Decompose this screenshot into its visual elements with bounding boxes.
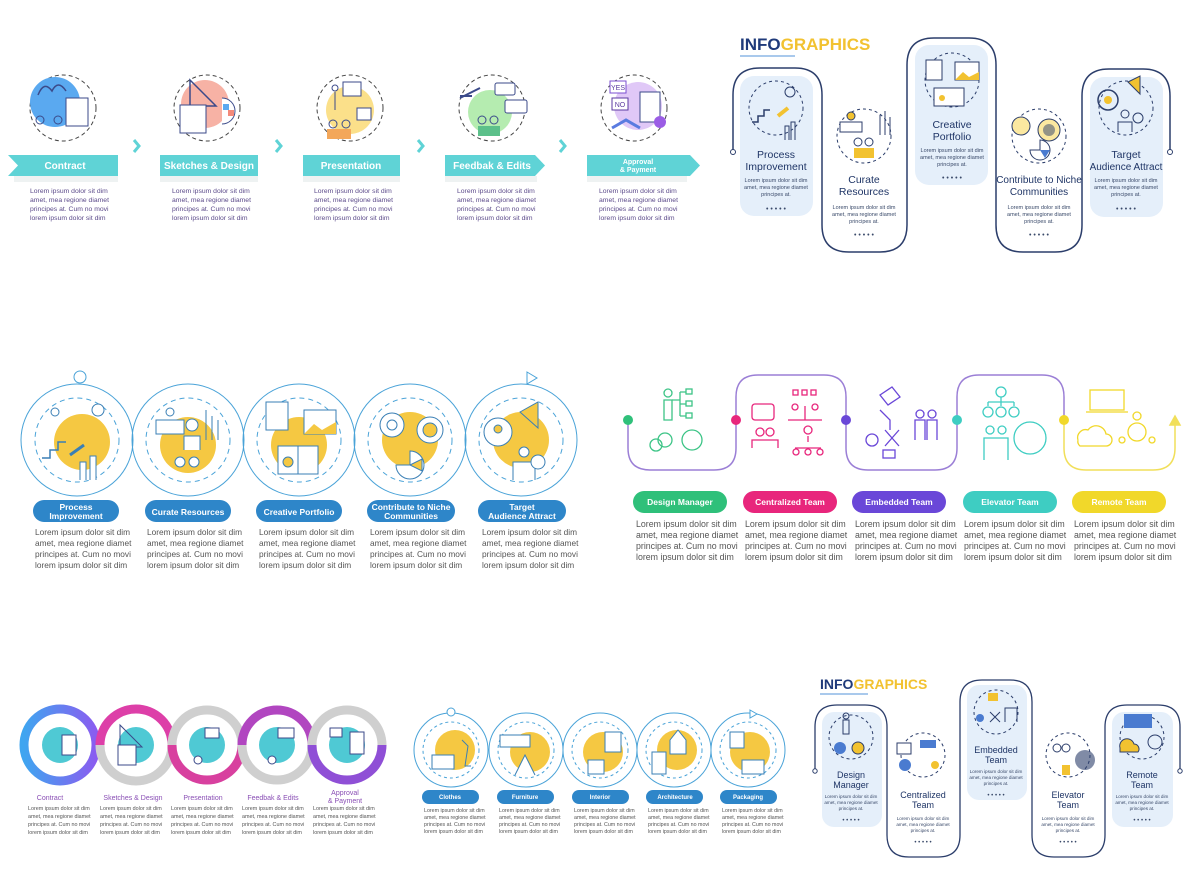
text blocks: principes at. Cum no movi [314, 206, 393, 213]
card: Elevator Team: Team [1057, 800, 1079, 810]
text blocks: lorem ipsum dolor sit dim [457, 215, 533, 222]
card: Process Improvement: Lorem ipsum dolor sit dim [745, 178, 808, 184]
text blocks: principes at. Cum no movi [745, 541, 847, 551]
text blocks: amet, mea regione diamet [259, 538, 356, 548]
pill labels: Interior [590, 795, 611, 801]
text blocks: Lorem ipsum dolor sit dim [35, 527, 130, 537]
text blocks: amet, mea regione diamet [964, 530, 1067, 540]
pill labels: Clothes [439, 795, 462, 801]
text blocks: amet, mea regione diamet [242, 814, 305, 820]
text blocks: amet, mea regione diamet [1074, 530, 1177, 540]
text blocks: principes at. Cum no movi [499, 822, 560, 828]
ring icons [42, 725, 365, 765]
icon: sketches [174, 75, 240, 141]
card: Curate Resources: amet, mea regione diamet [832, 212, 896, 218]
card: Embedded Team: Team [985, 755, 1007, 765]
card: Contribute to Niche Communities: principes at. [1024, 219, 1054, 225]
text blocks: Lorem ipsum dolor sit dim [499, 808, 560, 814]
pill labels: Architecture [657, 795, 693, 801]
text blocks: principes at. Cum no movi [457, 206, 536, 213]
panel: design team snake timeline (middle-right) [623, 375, 1180, 562]
text blocks: amet, mea regione diamet [28, 814, 91, 820]
text blocks: lorem ipsum dolor sit dim [855, 552, 953, 562]
card: Target Audience Attract: amet, mea regione diamet [1094, 185, 1158, 191]
text blocks [636, 519, 1177, 562]
card: Embedded Team: • • • • • [987, 793, 1005, 799]
icons [432, 730, 770, 775]
text blocks: principes at. Cum no movi [172, 206, 251, 213]
text blocks: lorem ipsum dolor sit dim [482, 560, 574, 570]
pill labels [49, 502, 556, 521]
card: Elevator Team: principes at. [1056, 828, 1080, 833]
text blocks: lorem ipsum dolor sit dim [100, 830, 160, 836]
card: Process Improvement: • • • • • [766, 206, 787, 213]
card: Design Manager: amet, mea regione diamet [824, 800, 878, 805]
text blocks: principes at. Cum no movi [30, 206, 109, 213]
circle icons [21, 371, 577, 496]
card: Process Improvement: Improvement [745, 161, 807, 173]
card: Centralized Team: amet, mea regione diamet [896, 822, 950, 827]
text blocks: amet, mea regione diamet [30, 197, 109, 204]
text blocks: Lorem ipsum dolor sit dim [599, 188, 677, 195]
text blocks: principes at. Cum no movi [424, 822, 485, 828]
text blocks: principes at. Cum no movi [259, 549, 355, 559]
text blocks: Lorem ipsum dolor sit dim [1074, 519, 1175, 529]
text blocks: Lorem ipsum dolor sit dim [636, 519, 737, 529]
ribbon: Approval & Payment: & Payment [620, 167, 657, 174]
text blocks: lorem ipsum dolor sit dim [370, 560, 462, 570]
card: Centralized Team: Team [912, 800, 934, 810]
ribbon: Contract [8, 155, 118, 182]
card: Target Audience Attract: principes at. [1111, 192, 1141, 198]
pill labels: Remote Team [1091, 497, 1147, 507]
card: Target Audience Attract: Lorem ipsum dolor sit dim [1095, 178, 1158, 184]
text blocks: lorem ipsum dolor sit dim [313, 830, 373, 836]
text blocks: amet, mea regione diamet [172, 197, 251, 204]
card: Remote Team: Lorem ipsum dolor sit dim [1116, 794, 1168, 799]
text blocks: amet, mea regione diamet [100, 814, 163, 820]
text blocks: amet, mea regione diamet [636, 530, 739, 540]
card fills [822, 685, 1173, 827]
card: Design Manager [824, 713, 878, 824]
pill labels: Centralized Team [755, 497, 825, 507]
text blocks: principes at. Cum no movi [964, 541, 1066, 551]
pills [633, 491, 1166, 513]
text blocks: lorem ipsum dolor sit dim [30, 215, 106, 222]
icon: embedded team [866, 387, 937, 458]
text blocks: lorem ipsum dolor sit dim [147, 560, 239, 570]
icon: approval: NO [615, 102, 626, 109]
text blocks: lorem ipsum dolor sit dim [242, 830, 302, 836]
text blocks: principes at. Cum no movi [35, 549, 131, 559]
card: Design Manager: Design [837, 770, 865, 780]
card: Contribute to Niche Communities: amet, mea regione diamet [1007, 212, 1071, 218]
pill labels: Process [59, 502, 93, 512]
text blocks: principes at. Cum no movi [171, 822, 233, 828]
text blocks: Lorem ipsum dolor sit dim [574, 808, 635, 814]
card: Target Audience Attract: Target [1111, 149, 1141, 161]
card: Remote Team: amet, mea regione diamet [1115, 800, 1169, 805]
card: Creative Portfolio [920, 53, 984, 182]
icon: contract [30, 75, 96, 141]
text blocks: lorem ipsum dolor sit dim [28, 830, 88, 836]
text blocks: Lorem ipsum dolor sit dim [313, 806, 375, 812]
text blocks: lorem ipsum dolor sit dim [648, 829, 707, 835]
text blocks: Lorem ipsum dolor sit dim [482, 527, 577, 537]
card: Elevator Team: • • • • • [1059, 840, 1077, 846]
labels: Feedbak & Edits [247, 795, 299, 802]
ribbon: Contract: Contract [44, 161, 86, 172]
card: Design Manager: • • • • • [842, 818, 860, 824]
icon: centralized team [752, 390, 823, 455]
card: Target Audience Attract: Audience Attract [1090, 162, 1163, 173]
card: Centralized Team: Lorem ipsum dolor sit dim [897, 816, 949, 821]
card: Curate Resources: Lorem ipsum dolor sit dim [833, 205, 896, 211]
ribbon: Feedbak & Edits: Feedbak & Edits [453, 161, 531, 172]
pill labels: Target [509, 502, 535, 512]
card: Embedded Team: principes at. [984, 781, 1008, 786]
card: Process Improvement [744, 81, 808, 213]
text blocks: amet, mea regione diamet [745, 530, 848, 540]
card: Curate Resources: Resources [839, 186, 889, 198]
text blocks: amet, mea regione diamet [574, 815, 636, 821]
text blocks: Lorem ipsum dolor sit dim [172, 188, 250, 195]
text blocks: Lorem ipsum dolor sit dim [147, 527, 242, 537]
card: Centralized Team: principes at. [911, 828, 935, 833]
labels: Sketches & Design [103, 795, 163, 802]
card: Remote Team: • • • • • [1133, 818, 1151, 824]
text blocks: principes at. Cum no movi [28, 822, 90, 828]
text blocks: amet, mea regione diamet [648, 815, 710, 821]
ribbon: Presentation: Presentation [321, 161, 381, 172]
card: Target Audience Attract [1090, 76, 1163, 213]
text blocks: principes at. Cum no movi [1074, 541, 1176, 551]
text blocks: lorem ipsum dolor sit dim [1074, 552, 1172, 562]
text blocks: principes at. Cum no movi [574, 822, 635, 828]
text blocks: principes at. Cum no movi [370, 549, 466, 559]
labels: & Payment [328, 798, 362, 805]
panel: team cards (bottom-right) [813, 676, 1182, 857]
text blocks: principes at. Cum no movi [648, 822, 709, 828]
card fills [740, 45, 1163, 217]
text blocks: lorem ipsum dolor sit dim [636, 552, 734, 562]
text blocks: Lorem ipsum dolor sit dim [259, 527, 354, 537]
text blocks: amet, mea regione diamet [313, 814, 376, 820]
card: Design Manager: Lorem ipsum dolor sit dim [825, 794, 877, 799]
text blocks: principes at. Cum no movi [636, 541, 738, 551]
icon: creative portfolio [266, 402, 336, 474]
icon: elevator team [983, 387, 1046, 460]
text blocks: amet, mea regione diamet [424, 815, 486, 821]
pill labels: Audience Attract [488, 511, 556, 521]
pill labels: Improvement [49, 511, 103, 521]
card: Centralized Team [896, 733, 950, 846]
text blocks: amet, mea regione diamet [499, 815, 561, 821]
text blocks: Lorem ipsum dolor sit dim [28, 806, 90, 812]
icon: target audience [484, 402, 549, 480]
card: Elevator Team: Elevator [1051, 790, 1085, 800]
pills [422, 790, 777, 804]
text blocks: principes at. Cum no movi [855, 541, 957, 551]
pill labels: Contribute to Niche [372, 502, 451, 512]
icon: curate resources [156, 408, 218, 473]
ribbon: Presentation [303, 155, 400, 182]
ribbon: Sketches & Design [160, 155, 258, 182]
card: Embedded Team [969, 690, 1023, 799]
card: Creative Portfolio: principes at. [937, 162, 967, 168]
pill labels: Creative Portfolio [264, 507, 334, 517]
card: Remote Team: Remote [1126, 770, 1158, 780]
card: Contribute to Niche Communities [996, 109, 1082, 239]
card: Curate Resources [832, 109, 896, 239]
card: Process Improvement: Process [757, 149, 795, 161]
ribbon: Approval & Payment: Approval [623, 159, 653, 166]
labels [37, 790, 362, 805]
text blocks: principes at. Cum no movi [313, 822, 375, 828]
text blocks: Lorem ipsum dolor sit dim [457, 188, 535, 195]
icon: niche communities [380, 412, 443, 479]
text blocks: Lorem ipsum dolor sit dim [370, 527, 465, 537]
text blocks: amet, mea regione diamet [35, 538, 132, 548]
text blocks: Lorem ipsum dolor sit dim [30, 188, 108, 195]
card: Creative Portfolio: • • • • • [942, 175, 963, 182]
card: Contribute to Niche Communities: Lorem ipsum dolor sit dim [1008, 205, 1071, 211]
ribbon: Approval & Payment [587, 155, 700, 182]
pill labels: Elevator Team [981, 497, 1039, 507]
icon: approval [601, 75, 667, 141]
card: Centralized Team: Centralized [900, 790, 946, 800]
card: Contribute to Niche Communities: Contribute to Niche [996, 175, 1082, 186]
card: Creative Portfolio: Portfolio [933, 131, 971, 143]
text blocks: lorem ipsum dolor sit dim [424, 829, 483, 835]
card: Creative Portfolio: Creative [932, 119, 972, 131]
text blocks: lorem ipsum dolor sit dim [574, 829, 633, 835]
card: Elevator Team: amet, mea regione diamet [1041, 822, 1095, 827]
icon: approval: YES [611, 85, 625, 92]
text blocks: lorem ipsum dolor sit dim [745, 552, 843, 562]
text blocks: principes at. Cum no movi [599, 206, 678, 213]
pill labels [647, 497, 1147, 507]
text blocks: principes at. Cum no movi [147, 549, 243, 559]
arrows between steps [134, 140, 565, 152]
connector path [730, 38, 1172, 252]
text blocks: principes at. Cum no movi [100, 822, 162, 828]
text blocks: amet, mea regione diamet [314, 197, 393, 204]
text blocks: Lorem ipsum dolor sit dim [171, 806, 233, 812]
card: Process Improvement: amet, mea regione diamet [744, 185, 808, 191]
text blocks: Lorem ipsum dolor sit dim [648, 808, 709, 814]
card: Target Audience Attract: • • • • • [1116, 206, 1137, 213]
card: Remote Team [1115, 714, 1169, 824]
icon: presentation [317, 75, 383, 141]
text blocks: lorem ipsum dolor sit dim [964, 552, 1062, 562]
panel: design process timeline (top-left) [8, 75, 700, 222]
ribbon: Feedbak & Edits [445, 155, 545, 182]
text blocks: lorem ipsum dolor sit dim [599, 215, 675, 222]
text blocks [35, 527, 579, 570]
text blocks: lorem ipsum dolor sit dim [171, 830, 231, 836]
panel: circles with yellow blobs (middle-left) [21, 371, 579, 570]
text blocks: amet, mea regione diamet [457, 197, 536, 204]
text blocks: lorem ipsum dolor sit dim [314, 215, 390, 222]
card: Embedded Team: Embedded [974, 745, 1018, 755]
icon: design manager [650, 389, 702, 451]
card: Centralized Team: • • • • • [914, 840, 932, 846]
text blocks: Lorem ipsum dolor sit dim [745, 519, 846, 529]
card: Process Improvement: principes at. [761, 192, 791, 198]
labels: Presentation [183, 795, 223, 802]
pill labels [439, 795, 763, 801]
text blocks: lorem ipsum dolor sit dim [259, 560, 351, 570]
text blocks: Lorem ipsum dolor sit dim [964, 519, 1065, 529]
icon: remote team [1078, 390, 1155, 446]
icon: process improvement [42, 404, 110, 480]
card: Contribute to Niche Communities: Communities [1010, 187, 1068, 198]
pill labels: Embedded Team [865, 497, 933, 507]
text blocks: Lorem ipsum dolor sit dim [855, 519, 956, 529]
connector path [813, 680, 1182, 857]
pill labels: Furniture [512, 795, 539, 801]
text blocks: Lorem ipsum dolor sit dim [242, 806, 304, 812]
text blocks: lorem ipsum dolor sit dim [499, 829, 558, 835]
text blocks: Lorem ipsum dolor sit dim [314, 188, 392, 195]
card: Elevator Team: Lorem ipsum dolor sit dim [1042, 816, 1094, 821]
text blocks: Lorem ipsum dolor sit dim [100, 806, 162, 812]
card: Curate Resources: Curate [848, 174, 880, 186]
labels: Contract [37, 795, 63, 802]
text blocks: amet, mea regione diamet [147, 538, 244, 548]
card: Contribute to Niche Communities: • • • • • [1029, 232, 1050, 239]
rings [24, 709, 382, 781]
text blocks: lorem ipsum dolor sit dim [35, 560, 127, 570]
text blocks [424, 808, 784, 835]
circles [414, 708, 785, 787]
panel: infographics cards (top-right) [730, 35, 1172, 252]
panel: gradient ring chain (bottom-left) [24, 709, 382, 836]
icon: feedback [459, 75, 527, 141]
card: Embedded Team: amet, mea regione diamet [969, 775, 1023, 780]
text blocks [30, 188, 678, 222]
card: Elevator Team [1041, 733, 1095, 846]
card: Remote Team: principes at. [1130, 806, 1154, 811]
text blocks: Lorem ipsum dolor sit dim [424, 808, 485, 814]
text blocks: amet, mea regione diamet [171, 814, 234, 820]
text blocks: amet, mea regione diamet [482, 538, 579, 548]
pill labels: Curate Resources [152, 507, 225, 517]
card: Creative Portfolio: Lorem ipsum dolor sit dim [921, 148, 984, 154]
text blocks: amet, mea regione diamet [599, 197, 678, 204]
dots [623, 415, 1069, 425]
text blocks: lorem ipsum dolor sit dim [722, 829, 781, 835]
labels: Approval [331, 790, 359, 797]
title: INFOGRAPHICS [820, 676, 927, 692]
text blocks: principes at. Cum no movi [242, 822, 304, 828]
card: Design Manager: principes at. [839, 806, 863, 811]
pill labels: Communities [384, 511, 438, 521]
text blocks: principes at. Cum no movi [482, 549, 578, 559]
ribbon: Sketches & Design: Sketches & Design [164, 161, 254, 172]
text blocks: amet, mea regione diamet [855, 530, 958, 540]
text blocks [28, 806, 376, 836]
pill labels: Design Manager [647, 497, 714, 507]
panel: design fields circles (bottom-middle) [414, 708, 785, 835]
card: Embedded Team: Lorem ipsum dolor sit dim [970, 769, 1022, 774]
card: Remote Team: Team [1131, 780, 1153, 790]
title: INFOGRAPHICS [740, 35, 870, 54]
label pills [33, 500, 566, 522]
snake path [628, 375, 1180, 470]
text blocks: Lorem ipsum dolor sit dim [722, 808, 783, 814]
card: Creative Portfolio: amet, mea regione diamet [920, 155, 984, 161]
text blocks: amet, mea regione diamet [722, 815, 784, 821]
text blocks: amet, mea regione diamet [370, 538, 467, 548]
card: Design Manager: Manager [833, 780, 869, 790]
pill labels: Packaging [733, 795, 763, 801]
text blocks: principes at. Cum no movi [722, 822, 783, 828]
card: Curate Resources: principes at. [849, 219, 879, 225]
text blocks: lorem ipsum dolor sit dim [172, 215, 248, 222]
card: Curate Resources: • • • • • [854, 232, 875, 239]
